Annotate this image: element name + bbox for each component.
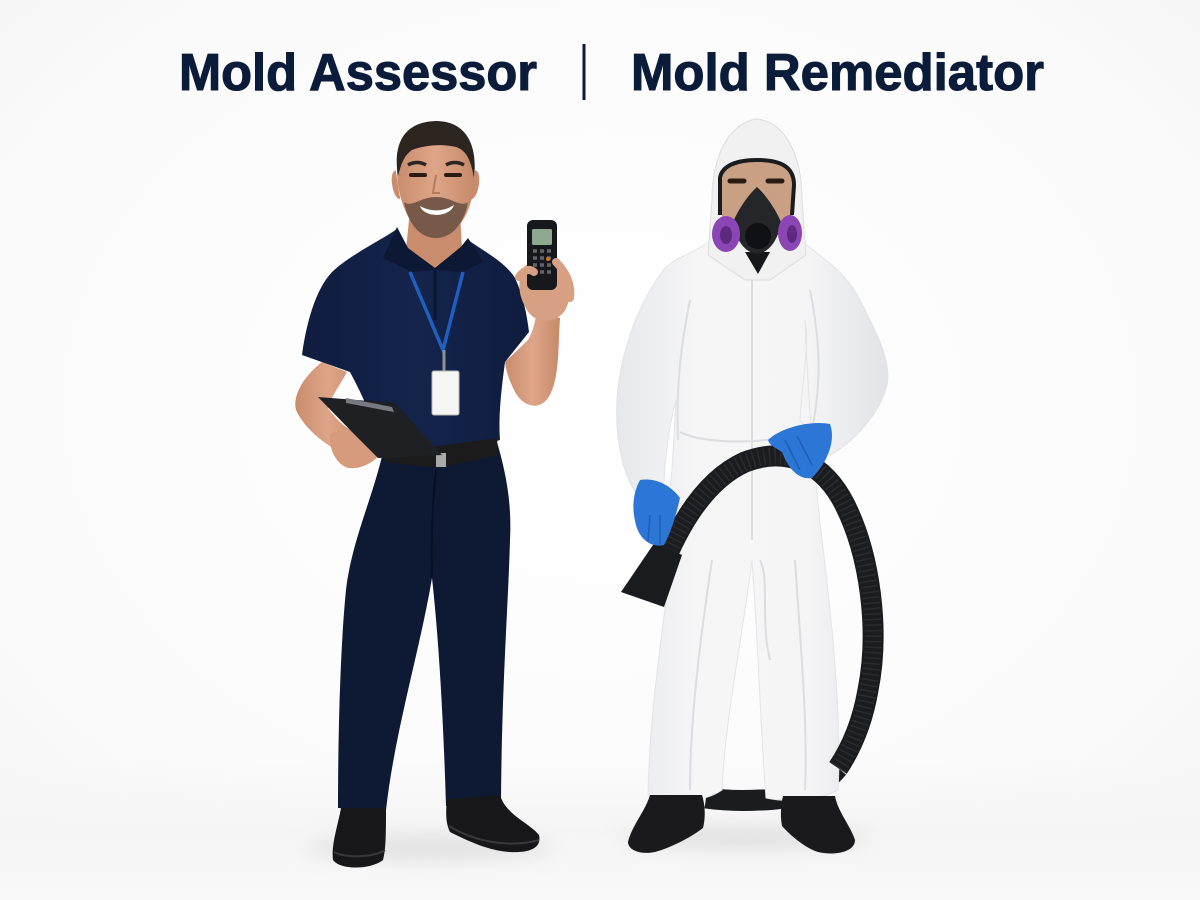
purple filter cartridges: [712, 216, 740, 252]
left blue glove: [633, 480, 680, 546]
face opening: [722, 160, 793, 235]
polo shirt: [302, 229, 529, 454]
fingers: [519, 262, 570, 298]
vacuum nozzle: [621, 542, 682, 607]
protective suit: [617, 240, 888, 801]
left shoe: [333, 808, 386, 868]
heading: Mold Assessor: Mold Assessor: [179, 44, 537, 102]
right shoe: [446, 795, 539, 852]
hood: [708, 119, 806, 280]
divider between headings: [582, 44, 586, 100]
left arm: [295, 362, 362, 456]
hair: [397, 121, 475, 178]
smile: [420, 205, 454, 215]
title row: [179, 44, 1044, 102]
suit folds: [678, 275, 819, 790]
eyes: [411, 173, 460, 177]
lanyard and badge: [410, 272, 463, 415]
neck: [406, 210, 462, 275]
respirator mask: [712, 187, 802, 254]
face: [397, 134, 474, 238]
trousers: [338, 442, 510, 810]
vacuum hose: front loop: [665, 456, 873, 768]
figure: mold remediator: [617, 119, 888, 854]
handheld meter: [519, 220, 570, 321]
clipboard: [318, 397, 442, 458]
right boot: [781, 796, 855, 854]
goggle strap and eyes: [720, 160, 794, 215]
figure: mold assessor: [295, 121, 570, 868]
right arm: [505, 312, 560, 406]
hand behind meter: [519, 261, 570, 321]
collar: [383, 227, 483, 272]
hand with clipboard: [330, 430, 386, 468]
head: [393, 121, 478, 238]
left boot: [628, 795, 705, 853]
floor shadow: assessor: [305, 835, 555, 861]
floor shadow: remediator: [620, 826, 870, 850]
right blue glove: [768, 423, 832, 478]
belt: [385, 438, 498, 468]
vacuum hose: behind legs: [706, 768, 838, 800]
heading: Mold Remediator: Mold Remediator: [631, 44, 1044, 102]
beard: [404, 197, 468, 238]
ears: [393, 172, 478, 198]
